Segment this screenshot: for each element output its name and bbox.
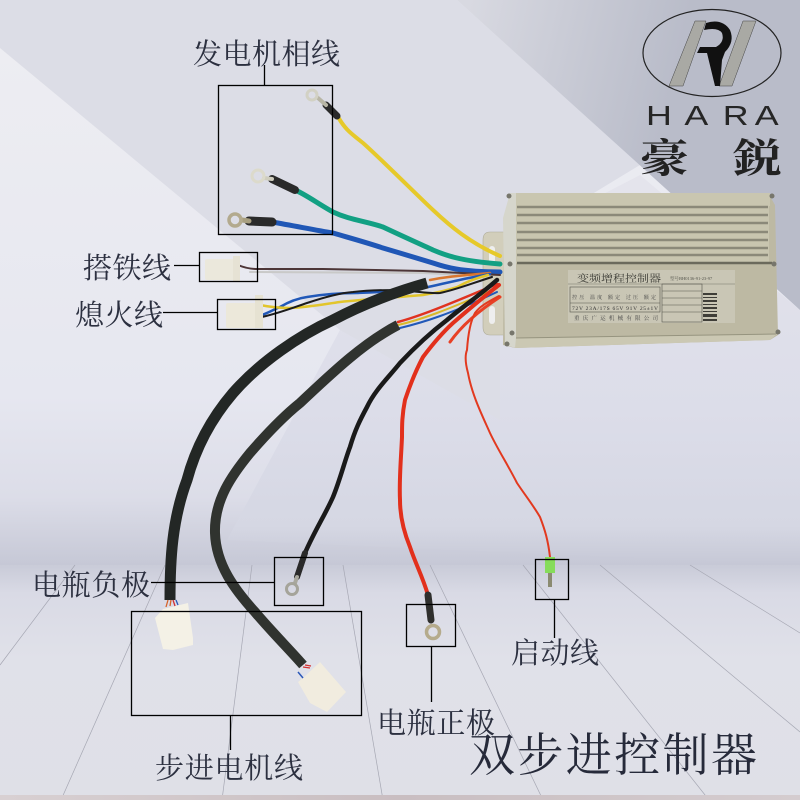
wire: generator phase green [252, 170, 500, 264]
callout: battery negative [151, 558, 324, 606]
terminal: battery negative ring [286, 584, 298, 594]
product label [568, 270, 735, 323]
connector: flameout plug [226, 295, 263, 328]
logo wordmark: HARA [646, 100, 779, 131]
wire: flameout bundle [260, 273, 492, 317]
label: stepper motor wires: 步进电机线 [155, 752, 303, 785]
mounting bracket [483, 232, 504, 335]
callout: flameout wire [163, 300, 276, 330]
callout: ground wire [174, 252, 258, 282]
callout: stepper motor wires [132, 612, 362, 750]
logo Chinese name: 鋭 [733, 136, 782, 181]
terminal: battery positive ring [426, 626, 440, 638]
product label: 重庆广运机械有限公司 [574, 314, 658, 322]
side plate [503, 193, 516, 348]
callout: battery positive [406, 604, 456, 702]
label: ground wire: 搭铁线 [83, 252, 171, 285]
controller box [503, 193, 780, 348]
callout: start wire [536, 560, 568, 638]
logo: HARA 豪鋭 [640, 10, 782, 181]
logo Chinese name: 豪 [640, 136, 689, 181]
product label: 控压 温度 额定 过压 额定 [572, 294, 656, 301]
wire: thick black stepper 2 [215, 325, 398, 665]
wires [170, 90, 550, 665]
connector: stepper plug 2 [298, 662, 346, 712]
wire: thick black stepper 1 [170, 283, 427, 600]
product label: 型号BH0136-91-23-97 [670, 275, 713, 282]
housing [503, 193, 778, 348]
callout: generator phase wires [218, 65, 332, 234]
label: battery negative: 电瓶负极 [32, 569, 150, 602]
terminal: start pin [545, 557, 555, 587]
wire: start [466, 296, 550, 557]
wire: battery negative [295, 280, 497, 583]
logo emblem [643, 10, 781, 96]
connector: ground plug [205, 256, 240, 281]
label: flameout wire: 熄火线 [75, 299, 163, 332]
callout boxes and leader lines [132, 65, 568, 750]
heat sink fins [517, 207, 768, 255]
wire: red blue yellow branch [398, 284, 497, 328]
wire: battery positive [400, 285, 499, 620]
connector: stepper plug 1 [155, 600, 193, 650]
wire: second red lead [450, 297, 500, 342]
product label: 72V 23A/17S 65V 91V 25±1V [572, 306, 658, 312]
wire: generator phase blue [229, 214, 500, 272]
label: start wire: 启动线 [511, 637, 599, 670]
wire: generator phase yellow [307, 90, 500, 256]
wire: ground [238, 265, 500, 276]
label: generator phase wires: 发电机相线 [193, 38, 340, 71]
title: 双步进控制器 [469, 730, 757, 781]
label: battery positive: 电瓶正极 [377, 707, 495, 740]
product label: 变频增程控制器 [577, 272, 661, 285]
screws [504, 194, 780, 346]
